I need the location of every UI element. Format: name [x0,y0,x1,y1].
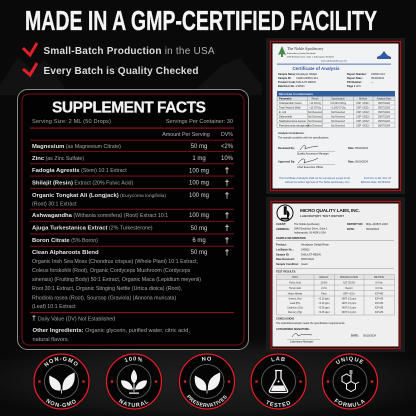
badge: non-gmo: NON-GMO [46,398,76,407]
sample metadata [278,72,385,88]
table: microbial contaminants: Not Detected [331,111,346,114]
sample metadata: Product Code: [278,80,296,84]
sample metadata: Himalayan Shilajit [296,72,317,76]
row: clean alpharoots blend [32,248,229,310]
row: shilajit: † [225,178,229,187]
sample information: SAMPLE INFORMATION [276,236,306,240]
client info: MQL-240507-2218 [366,222,388,226]
row: fadogia [32,166,229,175]
table: microbial contaminants [277,91,395,128]
signature: reviewed by: 05/10/2024 [355,146,369,150]
row: ashwagandha: Ashwagandha (Withania somnifera) (Root) Extract 10:1 [32,213,168,219]
signature: reviewed by [278,145,369,156]
signature: approved by: 05/10/2024 [355,160,369,164]
table: test results: RESULT [319,276,329,279]
row: boron: † [225,236,229,245]
row: magnesium: 50 mg [191,144,207,150]
heading: supplement facts: SUPPLEMENT FACTS [52,100,206,116]
table: microbial contaminants: Specification [331,98,345,100]
client info: The Noble Apothecary [294,222,320,226]
table: test results: Report [345,287,353,290]
table: microbial contaminants: USP <2022> [356,120,370,123]
certificate footer: This Certificate of Analysis shall not be reproduced except in full, [279,177,351,180]
table: test results: ICP-MS [375,311,384,314]
row: boron [32,236,229,245]
table: microbial contaminants: <10,000 CFU/g [330,102,347,105]
table: test results: Arsenic (As) [288,298,302,300]
feature: quality checked: Every Batch is Quality Checked [44,66,198,77]
table: microbial contaminants: Total Yeast & Mold [279,106,301,110]
table: microbial contaminants: <10 CFU/g [309,106,321,110]
row: clean alpharoots blend: Root 30:1 Extract, Organic Stinging Nettle (Urtica dioica) (Root), [32,286,182,292]
table: microbial contaminants: E. coli [279,110,286,114]
badge: 100% natural [106,353,162,410]
row: shilajit: Shilajit (Resin) Extract (20% Fulvic Acid) [32,180,134,186]
icon: flask [269,370,288,392]
table: microbial contaminants: <10 CFU/g [309,102,321,105]
background glow [0,338,416,416]
row: boron: Boron Citrate (5% Boron) [32,238,98,244]
row: clean alpharoots blend: Rhodiola rosea (Root), Soursop (Graviola) (Annona muricata) [32,295,176,301]
row: magnesium [32,144,234,150]
table: microbial contaminants: Analysis Date [377,98,392,100]
client info [276,222,388,234]
row: zinc: 10% [221,156,234,162]
signature: laboratory manager: 05/10/2024 [363,334,377,338]
certificate footer: without the written approval of The Noble Apothecary, LLC. [285,181,350,184]
badge: non-gmo [33,353,90,410]
table: test results: NMT 0.2 ppm [342,311,356,314]
table: microbial contaminants: <1,000 CFU/g [331,106,346,110]
table: microbial contaminants: 05/07/2024 [378,116,391,118]
footnote: daily value: † Daily Value (DV) Not Established [32,315,115,322]
badge: no preservatives: NO [202,356,212,361]
sample information: Himalayan Shilajit Resin [301,242,330,246]
feature: quality checked [23,63,198,77]
analysis conclusion: Analysis Conclusion: [278,131,305,135]
table: test results: ICP-MS [375,292,384,296]
sample information: SHILAJIT-RESIN [301,252,321,256]
row: zinc: Zinc (as Zinc Sulfate) [32,156,84,162]
table: test results: Heavy Metals [288,292,303,296]
row: fadogia: Fadogia Agrestis (Stem) 10:1 Extract [32,168,127,174]
badge: lab tested [250,353,307,410]
row: clean alpharoots blend: Coleus forskohlii (Root), Organic Cordyceps Mushroom (Cordyceps [32,268,191,274]
row: clean alpharoots blend: † [225,248,229,257]
certificate footer [279,177,392,184]
client info: CLIENT: [276,222,286,226]
sample metadata: CARN-240501-014 [296,76,319,80]
table: test results: 2.1% [321,287,328,290]
table: microbial contaminants: Not Detected [308,124,323,128]
signature: reviewed by: Reviewed By: [278,146,295,150]
sample metadata: SHILAJIT-RESIN [296,80,316,84]
lab heading: MICRO QUALITY LABS, INC. [300,208,360,214]
sample metadata: PO Number: [347,80,362,84]
row: ajuga [32,224,229,233]
table: test results: NMT 1.5 ppm [342,298,356,300]
badge: unique formula [322,353,378,410]
row: magnesium: <2% [221,144,234,150]
table: microbial contaminants: Staphylococcus aureus [279,119,307,123]
row: clean alpharoots blend: Clean Alpharoots Blend [32,250,99,256]
conclusion: The submitted sample meets the specification requirements. [276,321,345,325]
other ingredients: Other Ingredients: Organic glycerin, purified water, citric acid, [32,328,190,334]
table: microbial contaminants: 05/07/2024 [378,120,391,123]
table dividers [30,128,234,313]
client info: Indianapolis, IN 46241 USA [294,230,326,234]
signature: reviewed by: Date: [348,146,355,150]
table: microbial contaminants: 05/07/2024 [378,102,391,105]
row: zinc [32,156,234,162]
row: shilajit: 100 mg [189,181,209,187]
table: microbial contaminants: 05/07/2024 [378,124,391,128]
icon: apothecary logo [278,46,286,57]
table: microbial contaminants: Not Detected [331,124,346,128]
row: tongkat ali: 100 mg [189,193,209,199]
sample metadata: Batch/Lot No.: [278,84,296,88]
signature: reviewed by: Quality Assurance Manager [297,152,329,156]
row: clean alpharoots blend: 50 mg [191,250,207,256]
signature: laboratory manager: Laboratory Manager [290,340,313,344]
table: test results [276,270,394,315]
sample metadata: 240501-014 [371,72,385,76]
row: magnesium: Magnesium (as Magnesium Citrate) [32,144,121,150]
table: test results: Pass [321,292,327,296]
sample metadata: — [371,81,374,84]
table: microbial contaminants: Not Detected [308,120,323,123]
table: test results: TEST RESULTS: [276,270,296,274]
table: test results: NMT 1.0 ppm [342,302,356,305]
table: test results: Humic Acid [289,287,302,290]
row: tongkat ali: † [225,191,229,200]
table: microbial contaminants: USP <2022> [356,124,370,128]
other ingredients [32,328,190,343]
sample metadata: 240501 [296,84,305,88]
row: clean alpharoots blend: Organic Irish Sea Moss (Chondrus crispus) (Whole Plant) 10:1 Extract, [32,259,198,265]
signature: approved by [278,158,369,169]
table: test results: METHOD [374,276,384,279]
column headers: DV% [221,132,233,138]
row: tongkat ali: (Root) 30:1 Extract [32,201,77,207]
lab heading: LABORATORY TEST REPORT [300,214,344,218]
row: ashwagandha: 100 mg [189,213,209,219]
table: test results: NMT 0.5 ppm [342,306,356,310]
row: zinc: 1 mg [192,156,206,162]
sample information: Sample ID: [276,252,290,256]
client info: REPORT NO: [347,222,363,226]
panel: laboratory test report [266,197,405,352]
table: microbial contaminants: USP <2022> [356,116,370,118]
table: microbial contaminants: Microbial Contaminants [279,92,313,96]
table: test results: UV-Vis [375,282,383,284]
certificate header: 2940 Evolution Drive, Suite 1, Indianapolis, IN 46241 [287,56,335,58]
row: tongkat ali: Organic Tongkat Ali (Longjack) (Eurycoma longifolia) [32,193,166,199]
sample metadata: Report Date: [347,76,363,80]
signature: laboratory manager: DATE: [351,334,359,338]
sample information: Good [301,262,308,266]
table: microbial contaminants: Pseudomonas aeruginosa [279,124,310,128]
icon: molecule [342,370,359,392]
table: test results: 20.3% [321,282,328,284]
table: test results: Lead (Pb) [290,302,300,305]
feature: small-batch production: Small-Batch Production in the USA [44,46,215,57]
table: test results: Fulvic Acid [289,282,301,284]
lab heading [300,208,360,218]
sample metadata: Sample ID: [278,76,292,80]
sample information: 05/07/2024 [301,257,315,261]
table: microbial contaminants: Not Detected [308,116,323,118]
client info: 05/10/2024 [366,227,380,231]
certificate footer: Effective Date: 02/15/2024 [361,181,391,184]
row: tongkat ali [32,191,229,207]
sample information: Date Received: [276,257,295,261]
panel: supplement facts [18,90,248,350]
signature: approved by: Approved By: [278,160,295,164]
row: fadogia: † [225,166,229,175]
table: test results: USP <231> [343,292,356,296]
table: test results: <0.10 ppm [318,298,330,300]
table: microbial contaminants: Result [312,98,319,100]
table: test results: <0.05 ppm [318,306,330,310]
table: test results: ICP-MS [375,302,384,305]
certificate header: Extraordinary Quality Standards [287,52,315,55]
badge: non-gmo: NON-GMO [44,356,78,367]
table: microbial contaminants: Not Detected [308,111,323,114]
row: ajuga: Ajuga Turkestanica Extract (2% Turkesterone) [32,226,153,232]
icon: plant [121,370,147,394]
table: microbial contaminants: 05/07/2024 [378,106,391,110]
table: test results: <0.10 ppm [318,302,330,305]
table: microbial contaminants: USP <2021> [356,106,370,110]
table: microbial contaminants: Method [359,98,368,100]
table: test results: ICP-MS [375,306,384,310]
certificate footer: Form No: A-111, Rev. 00 [364,177,392,180]
table: test results: Mercury (Hg) [288,311,302,314]
conclusion: CONCLUSION: [276,316,294,320]
serving info: Servings Per Container: 30 [166,119,233,125]
icon: microscope logo [277,205,293,221]
table: test results: ICP-MS [375,298,384,300]
icon: check mark [23,43,37,55]
certificate header [287,46,347,62]
table: microbial contaminants: 05/07/2024 [378,111,391,114]
certificate header: The Noble Apothecary [287,46,323,51]
icon: certification seal [377,51,391,59]
icon: leaves [195,372,220,394]
badge: 100% natural: NATURAL [118,398,148,408]
client info: 2940 Evolution Drive, Suite 1 [294,226,328,230]
background mountains [0,57,262,95]
sample information: Sample Condition: [276,262,299,266]
row: clean alpharoots blend: (Leaf) 10:1 Extract [32,304,76,310]
panel: certificate of analysis [266,38,405,194]
badge: no preservatives [178,353,236,410]
row: boron: 6 mg [192,238,206,244]
analysis conclusion [278,131,329,140]
row: clean alpharoots blend: sinensis) (Fruiting Body) 50:1 Extract, Organic Maca (Lepidium meyenii) [32,277,201,283]
certificate header: www.nobleapothecary.com [321,60,347,62]
table: microbial contaminants: USP <2021> [356,102,370,105]
analysis conclusion: The sample complies with the specifications. [278,136,329,140]
row: ashwagandha: † [225,211,229,220]
badge: no preservatives: PRESERVATIVES [186,394,227,408]
client info: ADDRESS: [276,227,290,231]
sample information: Product: [276,242,287,246]
table: microbial contaminants: Not Detected [331,116,346,118]
sample metadata: Sample Name: [278,72,296,76]
column headers [162,132,233,138]
signature: laboratory manager: AUTHORIZED SIGNATURE: [276,327,310,331]
row: ajuga: † [225,224,229,233]
serving info [32,119,233,125]
table: microbial contaminants: Total Aerobic Count [279,101,302,105]
badge: unique formula: FORMULA [334,398,366,407]
badge: unique formula: UNIQUE [336,356,364,364]
column headers: Amount Per Serving [162,132,210,138]
sample information: 240501 [301,248,310,252]
serving info: Serving Size: 2 ML (50 Drops) [32,119,111,125]
badge: lab tested: LAB [271,356,285,362]
badge: lab tested: TESTED [266,400,290,407]
table: test results: UV-Vis [375,287,383,290]
table: microbial contaminants: Parameter [279,96,292,100]
table: microbial contaminants: Not Detected [331,120,346,123]
table: test results: Cadmium (Cd) [287,306,303,310]
icon: check mark [23,63,37,75]
signature: approved by: Date: [348,160,355,164]
row: ashwagandha [32,211,229,220]
sample metadata: 05/10/2024 [371,76,385,80]
signature: laboratory manager [276,327,377,344]
badge: 100% natural: 100% [124,356,142,362]
table: microbial contaminants: Salmonella [279,114,292,118]
heading: certificate of analysis: Certificate of Analysis [292,66,340,71]
sample metadata: Report Number: [347,72,367,76]
table: microbial contaminants: USP <2022> [356,111,370,114]
signature: approved by: Chief Executive Officer [297,165,323,169]
conclusion [276,316,345,325]
sample information [276,236,394,268]
sample information: Lot/Batch No.: [276,248,294,252]
sample metadata: Page 1 of 1 [347,84,361,88]
row: ajuga: 50 mg [191,226,207,232]
table: test results: NLT 20.0% [343,282,356,284]
row: fadogia: 100 mg [189,168,209,174]
row: shilajit [32,178,229,187]
icon: leaves [49,372,75,394]
table: test results: TEST [292,276,299,279]
table: test results: <0.05 ppm [318,311,330,314]
other ingredients: natural flavors. [32,337,70,343]
table: test results: SPECIFICATION [340,276,358,279]
client info: DATE: [347,227,355,231]
